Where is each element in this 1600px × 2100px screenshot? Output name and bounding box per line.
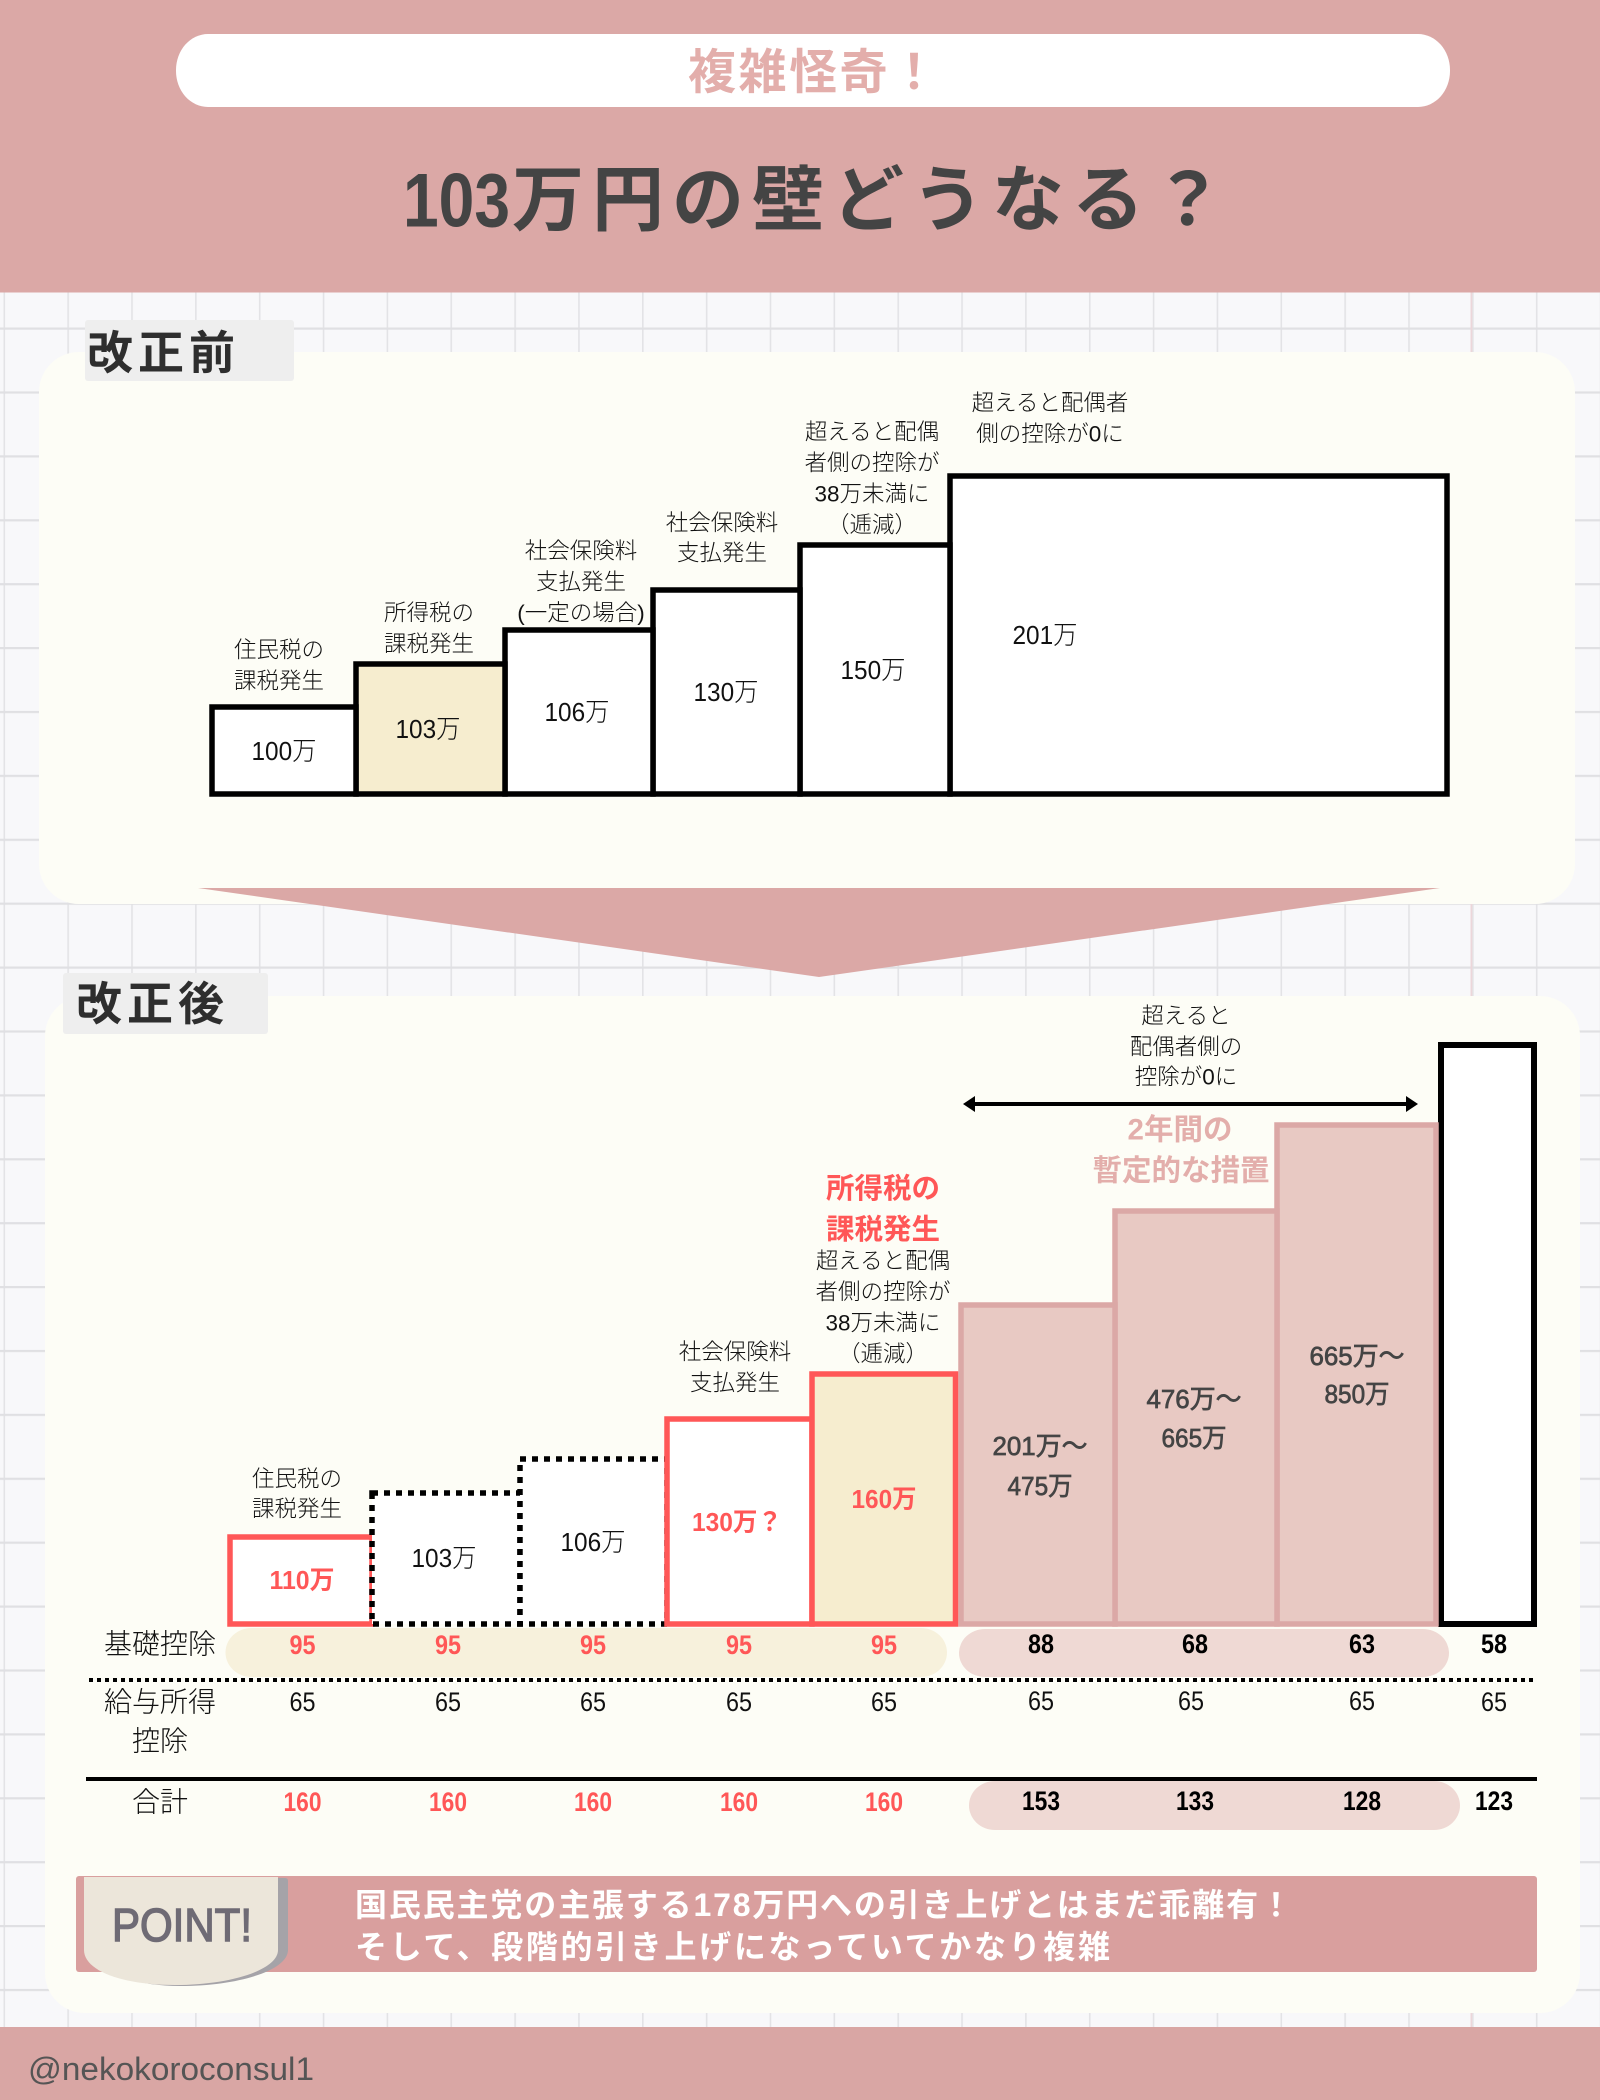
row: total: 153 (1022, 1786, 1060, 1816)
label: income tax callout: 所得税の (826, 1173, 940, 1205)
step 110万 red: 110万 (270, 1565, 334, 1595)
staircase chart: before (212, 476, 1447, 794)
label: social insurance (666, 510, 778, 566)
row: employment income deduction: 65 (871, 1687, 897, 1717)
label: spouse deduction zero (972, 390, 1128, 446)
step 130万 red: 130万？ (692, 1507, 782, 1537)
row: total: 160 (284, 1787, 322, 1817)
step 106万: 106万 (544, 697, 610, 727)
label: temporary measure: 2年間の (1128, 1114, 1232, 1146)
step 665万〜850万: 850万 (1324, 1379, 1390, 1409)
row: employment income deduction: 65 (290, 1687, 316, 1717)
row: employment income deduction: 65 (1178, 1686, 1204, 1716)
step 476万〜665万: 476万～ (1146, 1384, 1242, 1414)
step 160万 red: 160万 (852, 1484, 916, 1514)
step 103万 highlighted (356, 664, 505, 794)
table: deductions (86, 1628, 1537, 1830)
row: employment income deduction: 65 (435, 1687, 461, 1717)
panel: after revision (0, 973, 1600, 2100)
row: total: 160 (720, 1787, 758, 1817)
point text (355, 1887, 1292, 1965)
step 665万〜850万: 665万～ (1310, 1341, 1404, 1371)
step 103万 dotted (372, 1493, 520, 1624)
label: social insurance, conditional (517, 538, 645, 626)
step 476万〜665万 (1115, 1211, 1277, 1624)
label: spouse zero after (1130, 1004, 1242, 1090)
step 150万 (800, 545, 950, 794)
row: total: 133 (1176, 1786, 1214, 1816)
row: employment income deduction: 65 (1028, 1686, 1054, 1716)
label: social insurance after: 社会保険料 (679, 1340, 791, 1364)
step 103万 dotted: 103万 (412, 1543, 476, 1573)
row: basic deduction: 58 (1481, 1629, 1507, 1659)
label: spouse deduction taper: 38万未満に (814, 482, 930, 506)
label: social insurance after (679, 1340, 791, 1396)
label: resident tax after (252, 1466, 342, 1522)
subtitle pill (176, 34, 1450, 107)
step 201万 (950, 476, 1447, 794)
label: spouse taper after: （逓減） (838, 1342, 928, 1366)
label: social insurance: 支払発生 (677, 540, 767, 566)
row: basic deduction: 95 (580, 1630, 606, 1660)
step 201万: 201万 (1012, 620, 1078, 650)
heading tag: after: 改正後 (76, 978, 224, 1030)
row: employment income deduction: 65 (1349, 1686, 1375, 1716)
arrow: down from before to after (198, 888, 1440, 977)
step 665万〜850万 (1277, 1125, 1436, 1624)
highlight pill: cream row (226, 1628, 947, 1677)
label: temporary measure (1092, 1114, 1270, 1188)
row: employment income deduction: 給与所得 (104, 1686, 216, 1718)
row: employment income deduction: 控除 (132, 1726, 188, 1756)
heading tag: before (85, 320, 294, 381)
label: income tax: 課税発生 (384, 632, 474, 656)
subtitle pill: 複雑怪奇！ (688, 46, 941, 100)
label: resident tax after: 課税発生 (252, 1496, 342, 1522)
label: spouse zero after: 配偶者側の (1130, 1034, 1242, 1060)
row: total: 160 (429, 1787, 467, 1817)
highlight pill: pink total (969, 1781, 1460, 1830)
label: social insurance, conditional: 社会保険料 (525, 538, 637, 564)
row: total: 128 (1343, 1786, 1381, 1816)
row: total: 160 (865, 1787, 903, 1817)
label: spouse deduction zero: 側の控除が0に (976, 422, 1124, 446)
label: spouse taper after (815, 1248, 951, 1366)
row: employment income deduction: 65 (580, 1687, 606, 1717)
icon: point badge (84, 1877, 288, 1986)
label: income tax callout (826, 1173, 940, 1246)
step 100万: 100万 (252, 736, 316, 766)
row: basic deduction: 95 (871, 1630, 897, 1660)
step: top bracket (1441, 1045, 1534, 1624)
footer band (0, 2027, 1600, 2100)
step 201万〜475万: 201万～ (992, 1431, 1088, 1461)
step 106万 dotted: 106万 (560, 1527, 626, 1557)
step 100万 (212, 707, 356, 794)
label: spouse deduction zero: 超えると配偶者 (972, 390, 1128, 416)
label: resident tax: 課税発生 (234, 668, 324, 694)
step 106万 (505, 630, 653, 794)
label: resident tax: 住民税の (234, 638, 324, 662)
row: employment income deduction: 65 (726, 1687, 752, 1717)
step 130万: 130万 (694, 677, 758, 707)
highlight pill: pink row (959, 1629, 1449, 1677)
icon: point badge: POINT! (112, 1899, 252, 1951)
row: basic deduction: 88 (1028, 1629, 1054, 1659)
label: income tax callout: 課税発生 (826, 1214, 940, 1246)
step 130万 red (667, 1419, 812, 1624)
title: 103 (403, 158, 510, 244)
label: spouse deduction taper (804, 420, 940, 538)
row: basic deduction: 68 (1182, 1629, 1208, 1659)
row: total: 123 (1475, 1786, 1513, 1816)
label: income tax (384, 600, 474, 656)
row: basic deduction: 95 (726, 1630, 752, 1660)
row: basic deduction: 基礎控除 (104, 1628, 216, 1660)
label: spouse zero after: 超えると (1141, 1004, 1231, 1028)
label: social insurance, conditional: 支払発生 (536, 570, 626, 594)
step 201万〜475万 (961, 1305, 1115, 1624)
step 201万〜475万: 475万 (1008, 1471, 1072, 1501)
row: total: 160 (574, 1787, 612, 1817)
label: spouse taper after: 者側の控除が (815, 1280, 951, 1304)
label: spouse deduction taper: 超えると配偶 (805, 420, 939, 444)
step 130万 (653, 590, 800, 794)
point text: 国民民主党の主張する178万円への引き上げとはまだ乖離有！ (355, 1887, 1292, 1923)
row: basic deduction: 63 (1349, 1629, 1375, 1659)
label: social insurance after: 支払発生 (690, 1370, 780, 1396)
step 103万 highlighted: 103万 (396, 714, 460, 744)
row: total (132, 1786, 1513, 1818)
staircase chart: after (230, 1045, 1534, 1624)
heading tag: before: 改正前 (87, 327, 235, 379)
label: temporary measure: 暫定的な措置 (1092, 1154, 1270, 1188)
header band (0, 0, 1600, 292)
heading tag: after (63, 973, 268, 1034)
row: basic deduction: 95 (290, 1630, 316, 1660)
point banner (76, 1876, 1537, 1986)
step 110万 red (230, 1537, 372, 1624)
footer handle: @nekokoroconsul1 (28, 2051, 314, 2087)
label: resident tax after: 住民税の (252, 1466, 342, 1492)
label: income tax: 所得税の (384, 600, 474, 626)
panel: before revision (39, 320, 1575, 904)
row: total: 合計 (132, 1786, 188, 1818)
point text: そして、段階的引き上げになっていてかなり複雑 (355, 1929, 1110, 1965)
row: employment income deduction: 65 (1481, 1687, 1507, 1717)
label: social insurance: 社会保険料 (666, 510, 778, 536)
row: basic deduction (104, 1628, 1507, 1660)
label: spouse deduction taper: （逓減） (827, 512, 917, 538)
step 160万 red (812, 1374, 956, 1624)
label: spouse deduction taper: 者側の控除が (804, 450, 940, 476)
double arrow: range (963, 1096, 1418, 1112)
label: spouse zero after: 控除が0に (1135, 1064, 1237, 1090)
row: employment income deduction (104, 1686, 1507, 1756)
label: spouse taper after: 超えると配偶 (816, 1248, 950, 1274)
row: basic deduction: 95 (435, 1630, 461, 1660)
step 476万〜665万: 665万 (1162, 1423, 1226, 1453)
label: spouse taper after: 38万未満に (825, 1310, 941, 1336)
title: 万円の壁どうなる？ (512, 161, 1232, 241)
step 106万 dotted (520, 1459, 667, 1624)
label: resident tax (234, 638, 324, 694)
step 150万: 150万 (840, 655, 906, 685)
label: social insurance, conditional: (一定の場合) (517, 600, 645, 626)
